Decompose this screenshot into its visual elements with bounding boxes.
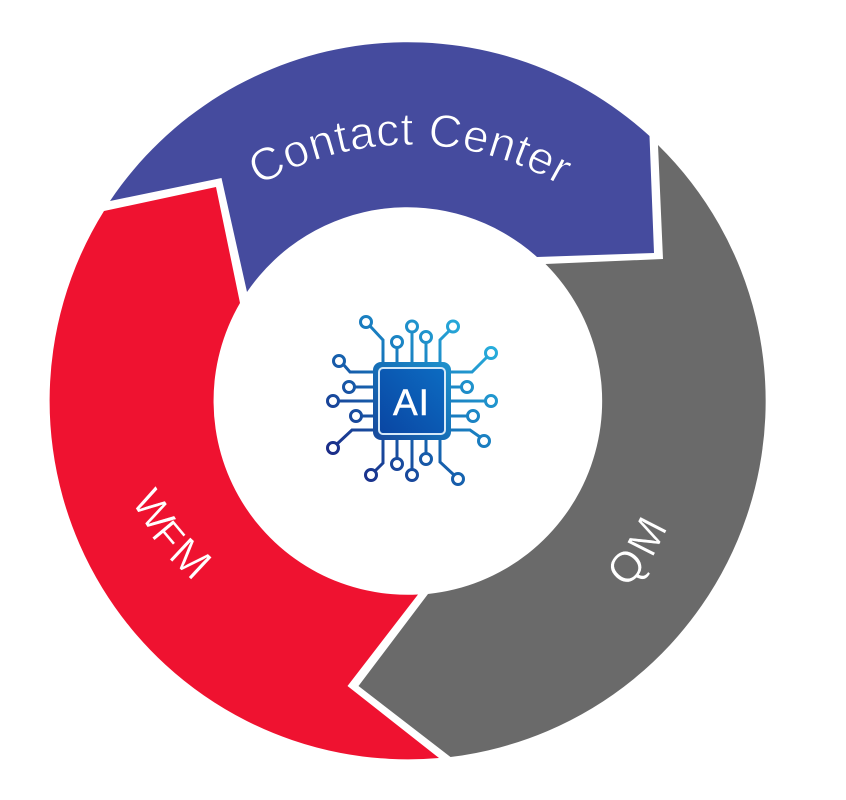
icon: AI chip xyxy=(328,316,496,484)
chip label: AI: AI xyxy=(393,382,430,423)
chip body xyxy=(373,362,451,440)
label: Contact Center: Contact Center xyxy=(252,115,572,181)
label: WFM: M xyxy=(160,528,220,589)
label: WFM: W xyxy=(123,481,184,540)
segment: WFM (red arrow) xyxy=(50,187,439,759)
segment: Contact Center (blue arrow) xyxy=(110,42,654,292)
label: WFM: F xyxy=(143,513,193,560)
chip inner outline xyxy=(379,368,445,434)
label: QM: QM xyxy=(598,510,677,596)
